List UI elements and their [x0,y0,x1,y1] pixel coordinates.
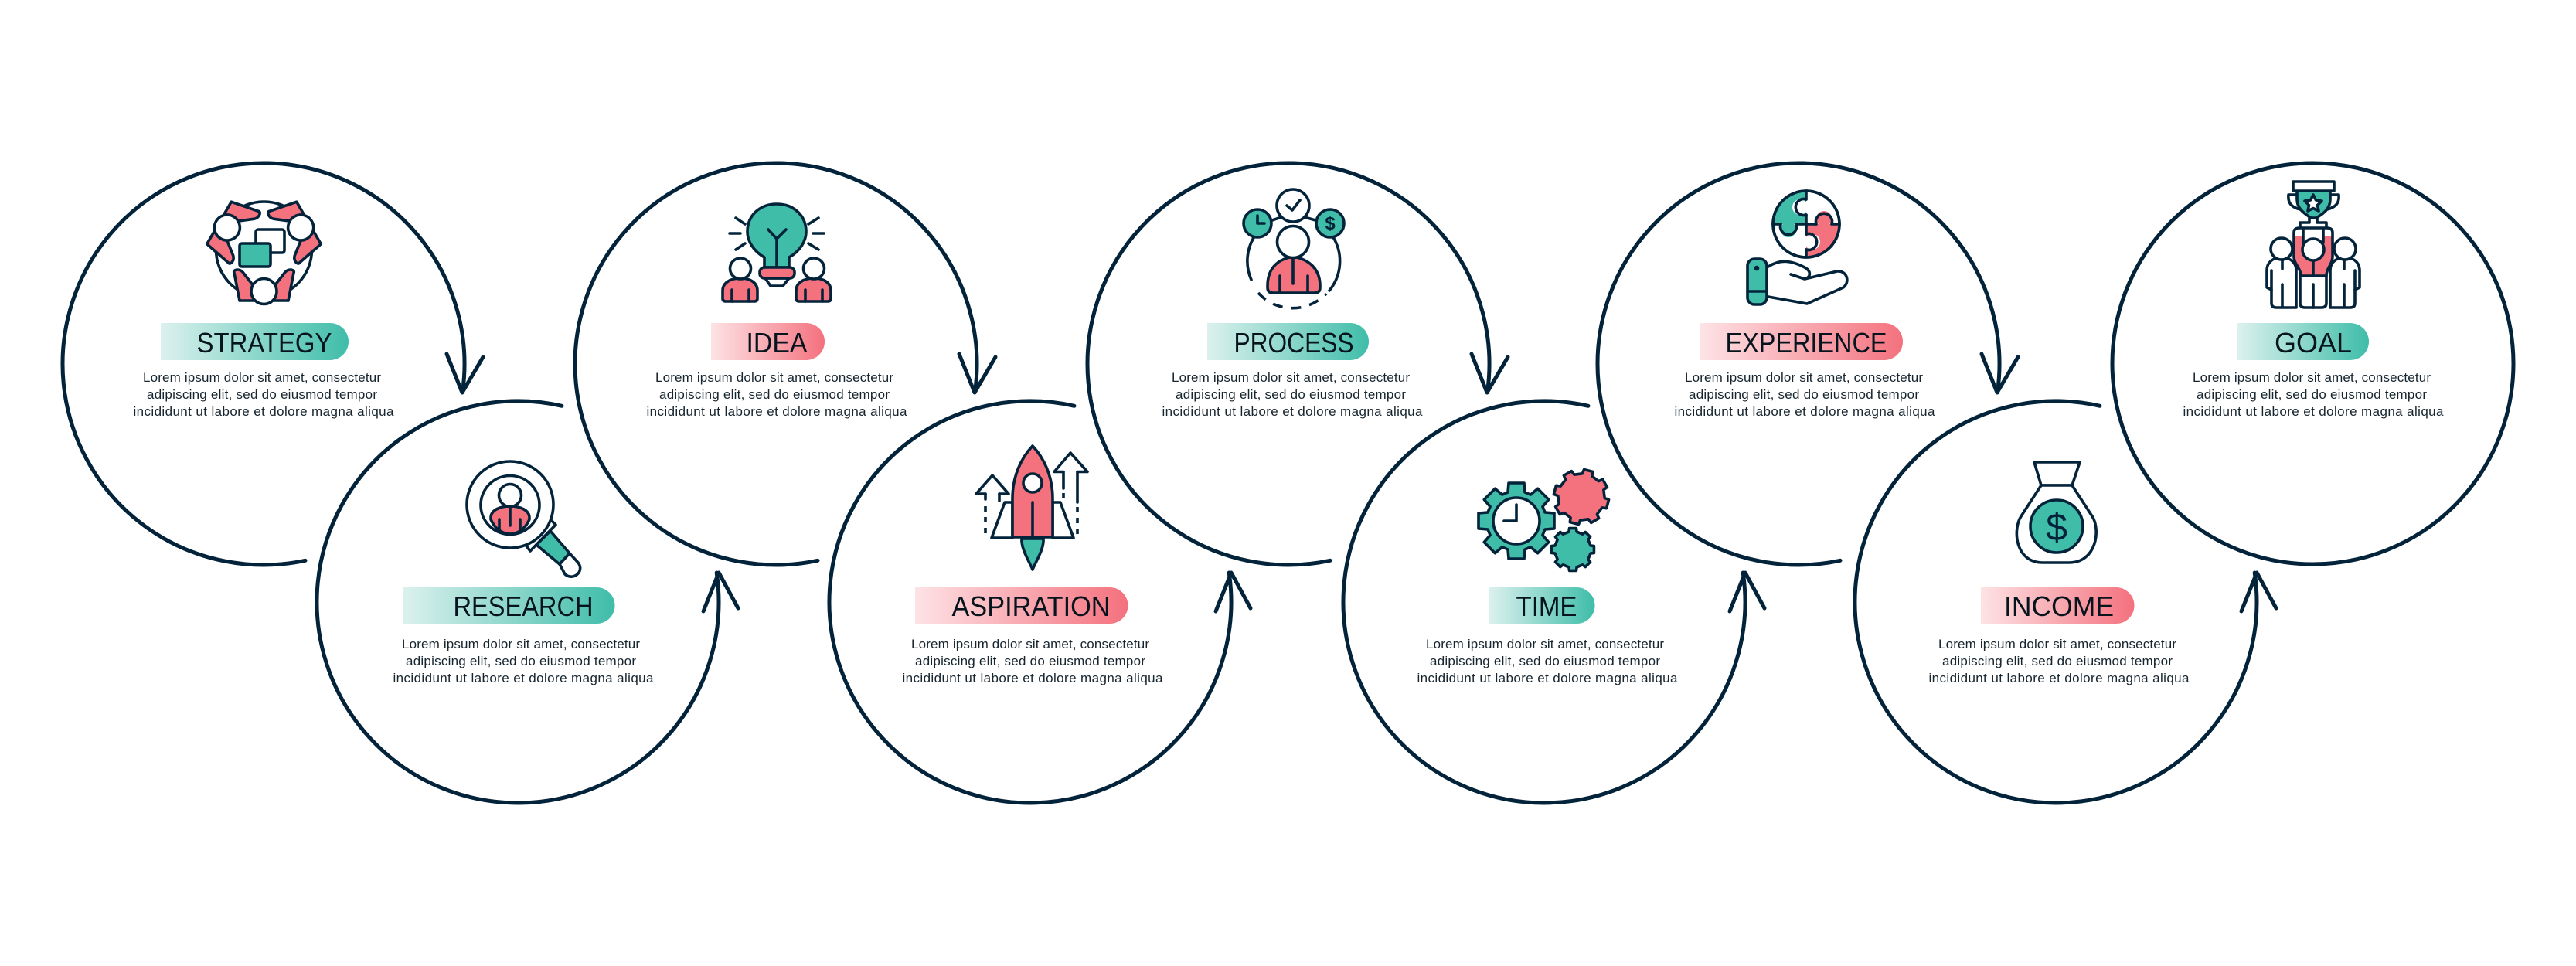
panel: goal [2112,163,2513,564]
text: idea [646,370,907,419]
icon: money bag [2016,462,2096,563]
heading: time [1489,587,1595,624]
heading: process: PROCESS [1234,327,1354,359]
text: process [1162,370,1423,419]
heading: idea: IDEA [747,327,807,359]
text: income: incididunt ut labore et dolore magna aliqua [1929,671,2190,685]
icon: rocket with arrows [976,446,1087,570]
ring arrow: experience to income [1598,163,2018,565]
text: research [393,637,654,685]
text: goal [2183,370,2444,419]
ring arrow: aspiration to process [829,401,1251,803]
text: idea: adipiscing elit, sed do eiusmod tempor [659,387,890,402]
heading: aspiration [915,587,1128,624]
ring arrow: time to experience [1343,401,1764,803]
text: experience [1674,370,1935,419]
text: idea: Lorem ipsum dolor sit amet, consectetur [655,370,893,385]
panel: strategy [63,163,483,565]
heading: time: TIME [1516,590,1577,622]
text: time [1417,637,1678,685]
text: goal: incididunt ut labore et dolore magna aliqua [2183,404,2444,419]
icon: team around table [201,196,327,304]
icon: magnifier with person [467,461,580,577]
heading: strategy: STRATEGY [196,327,332,359]
icon: trophy team [2267,182,2360,308]
text: research: Lorem ipsum dolor sit amet, consectetur [402,637,640,651]
icon: person with cycle [1244,189,1344,308]
text: goal: Lorem ipsum dolor sit amet, consectetur [2193,370,2431,385]
text: experience: incididunt ut labore et dolore magna aliqua [1674,404,1935,419]
text: goal: adipiscing elit, sed do eiusmod tempor [2197,387,2427,402]
panel: income [1855,401,2276,803]
text: research: adipiscing elit, sed do eiusmod tempor [406,654,636,668]
text: time: Lorem ipsum dolor sit amet, consectetur [1426,637,1664,651]
heading: research [403,587,615,624]
panel: process [1087,163,1508,565]
text: aspiration: Lorem ipsum dolor sit amet, consectetur [911,637,1149,651]
text: idea: incididunt ut labore et dolore magna aliqua [646,404,907,419]
heading: strategy [161,323,349,360]
heading: experience: EXPERIENCE [1725,327,1887,359]
text: income: Lorem ipsum dolor sit amet, consectetur [1938,637,2176,651]
heading: goal [2237,323,2369,360]
text: experience: Lorem ipsum dolor sit amet, consectetur [1685,370,1923,385]
heading: research: RESEARCH [453,590,594,622]
text: experience: adipiscing elit, sed do eiusmod tempor [1689,387,1919,402]
text: strategy: adipiscing elit, sed do eiusmod tempor [147,387,377,402]
panel: aspiration [829,401,1251,803]
panel: idea [575,163,995,565]
panel: experience [1598,163,2018,565]
text: process: incididunt ut labore et dolore magna aliqua [1162,404,1423,419]
text: time: adipiscing elit, sed do eiusmod tempor [1430,654,1660,668]
text: aspiration: adipiscing elit, sed do eiusmod tempor [915,654,1145,668]
icon: dollar sign: $ [1325,213,1336,234]
heading: income [1981,587,2135,624]
ring arrow: process to time [1087,163,1508,565]
text: strategy: incididunt ut labore et dolore magna aliqua [133,404,394,419]
icon: dollar in coin: $ [2046,505,2067,549]
heading: aspiration: ASPIRATION [952,590,1110,622]
text: time: incididunt ut labore et dolore magna aliqua [1417,671,1678,685]
heading: income: INCOME [2004,590,2114,622]
text: strategy [133,370,394,419]
icon: light bulb with two people [723,204,831,301]
ring arrow: strategy to research [63,163,483,565]
text: process: adipiscing elit, sed do eiusmod tempor [1176,387,1406,402]
ring: goal [2112,163,2513,564]
panel: research [317,401,738,803]
ring arrow: research to idea [317,401,738,803]
text: aspiration: incididunt ut labore et dolore magna aliqua [903,671,1163,685]
icon: puzzle over hand [1747,191,1847,304]
ring arrow: idea to aspiration [575,163,995,565]
text: research: incididunt ut labore et dolore magna aliqua [393,671,654,685]
heading: goal: GOAL [2275,327,2352,359]
text: strategy: Lorem ipsum dolor sit amet, consectetur [143,370,381,385]
text: income [1929,637,2190,685]
heading: idea [711,323,825,360]
ring arrow: income to goal [1855,401,2276,803]
panel: time [1343,401,1764,803]
text: process: Lorem ipsum dolor sit amet, consectetur [1172,370,1410,385]
text: aspiration [903,637,1163,685]
text: income: adipiscing elit, sed do eiusmod tempor [1942,654,2173,668]
icon: gears with clock [1479,464,1615,570]
